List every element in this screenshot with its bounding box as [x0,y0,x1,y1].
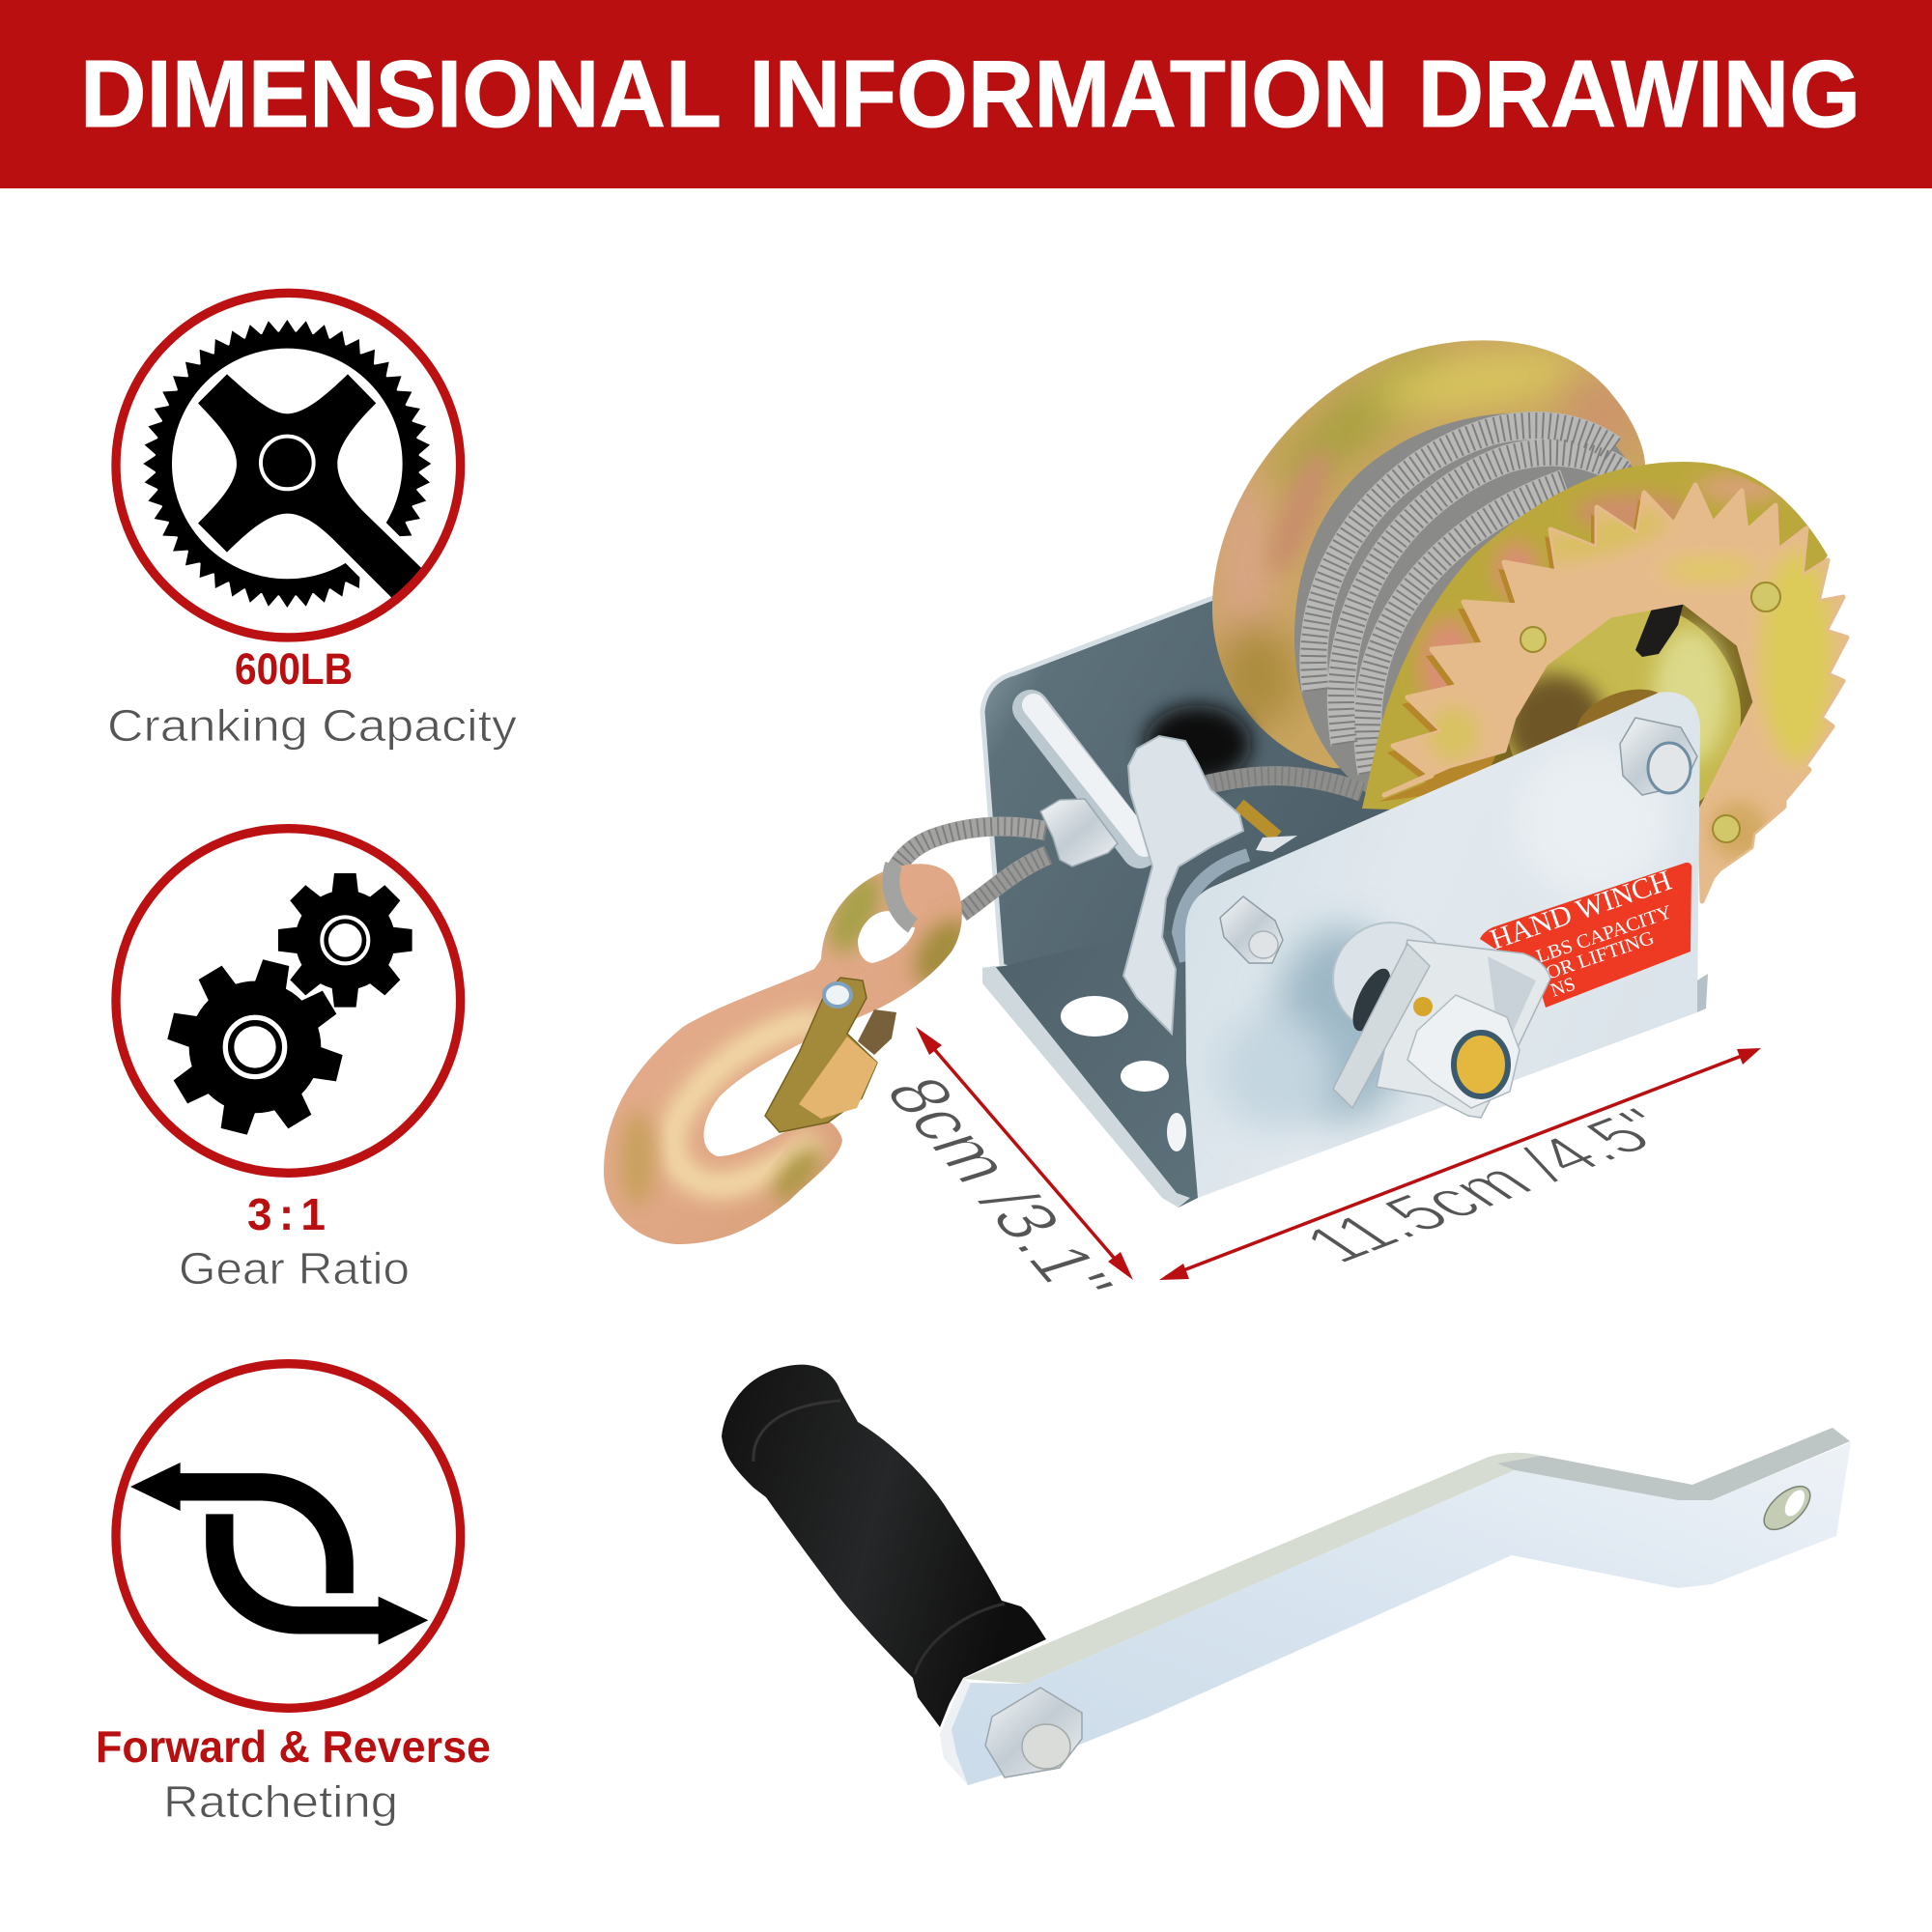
value: forward and reverse: Forward & Reverse [96,1721,491,1772]
latch spring [858,1009,896,1055]
icon: two gears [116,829,461,1173]
bolt tip [1022,1724,1070,1769]
left bolt [1220,896,1283,963]
feature: cranking capacity [107,293,517,751]
cable ferrule [1040,799,1118,867]
gear back rim [1362,462,1828,811]
shaft clamp [1256,836,1297,852]
wire rope to hook [890,776,1362,925]
hook latch [765,978,877,1132]
rear drum flange [1212,329,1645,773]
red warning label [1480,863,1691,1008]
product photo: hand winch [604,329,1847,1244]
steel arm front face [940,1442,1851,1785]
value: 3 : 1: 3 : 1 [247,1189,326,1239]
spacer washers [1179,855,1248,961]
label text: lifting: OR LIFTING [1543,927,1657,984]
product photo: crank handle [722,1365,1851,1785]
gear tooth flanks [1378,492,1822,802]
rubber grip [722,1365,1046,1727]
dimension text: width: 11.5cm /4.5" [1285,1097,1691,1273]
plate side tab [1697,974,1708,1012]
front toothed gear [1384,485,1847,901]
label text: hand winch: HAND WINCH [1487,865,1676,956]
icon: chainring and crank [116,293,461,638]
slot hole [1756,1478,1818,1538]
crank pin [1031,705,1145,850]
front side plate [1185,692,1700,1198]
feature: forward and reverse ratcheting [96,1364,491,1827]
header banner [0,0,1932,188]
title: DIMENSIONAL INFORMATION DRAWING [80,41,1861,147]
bottom plate with holes [982,927,1198,1208]
value: 600LB: 600LB [235,644,353,694]
ratchet release lever [1333,940,1550,1118]
hex nut [985,1688,1082,1777]
axle nut [1407,995,1520,1108]
hook eye hole [858,911,915,963]
label text: tons: NS [1548,974,1578,1002]
dimension arrow: width [1159,1048,1761,1280]
washer edge [940,1679,971,1785]
steel arm top face [963,1428,1850,1684]
wound wire cable [1294,413,1637,797]
gear rivets [1520,582,1780,842]
dimension text: depth: 8cm /3.1" [867,1069,1131,1309]
shadow behind pawl [1145,705,1251,782]
icon: two-way curved arrows [116,1364,461,1708]
upper right bolt [1620,718,1697,795]
dimension arrow: depth [916,1027,1133,1280]
label: ratcheting: Ratcheting [163,1776,398,1827]
back wall of frame [982,541,1449,1014]
snap hook [604,864,980,1244]
pawl lever [1123,736,1243,1034]
gear inner disc [1488,601,1755,829]
shaft behind plate [1239,805,1277,837]
feature: gear ratio [116,829,461,1293]
label text: capacity: LBS CAPACITY [1533,901,1675,968]
ratchet hub [1333,923,1449,1037]
label: gear ratio: Gear Ratio [179,1243,410,1293]
drive bush [1568,678,1678,761]
label: cranking capacity: Cranking Capacity [107,700,517,751]
grey bend edge [1497,1428,1850,1500]
cable through eye [891,865,913,925]
